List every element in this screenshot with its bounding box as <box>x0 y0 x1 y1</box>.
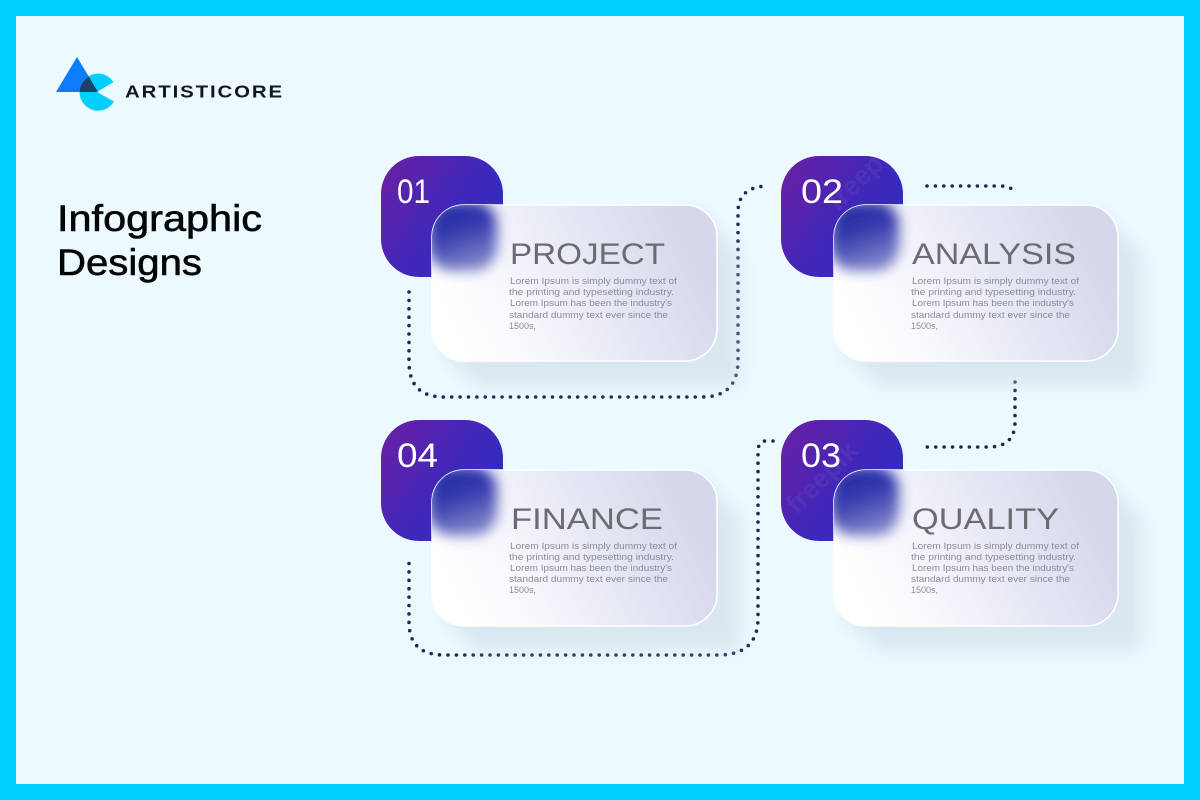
glass card <box>432 470 717 626</box>
body text: Lorem Ipsum is simply dummy text of <box>510 541 677 552</box>
frosted overlap <box>830 201 899 271</box>
title <box>57 198 262 283</box>
heading: ANALYSIS <box>912 238 1076 271</box>
card shadow <box>842 477 1141 651</box>
body text: Lorem Ipsum has been the industry's <box>510 563 672 574</box>
body text: standard dummy text ever since the <box>911 574 1070 585</box>
watermark: freepik <box>780 435 865 519</box>
card shadow <box>440 212 740 386</box>
logo <box>56 57 284 111</box>
body text: 1500s, <box>911 321 938 332</box>
body text: Lorem Ipsum is simply dummy text of <box>912 276 1079 287</box>
body text: 1500s, <box>911 585 938 596</box>
heading: FINANCE <box>511 503 663 536</box>
body text: the printing and typesetting industry. <box>911 552 1076 563</box>
dotted connector: project to analysis <box>409 186 767 397</box>
body text <box>509 541 677 596</box>
body text: Lorem Ipsum is simply dummy text of <box>510 276 677 287</box>
logo wordmark: ARTISTICORE <box>125 82 284 102</box>
panel: 01 project <box>381 156 740 386</box>
panel: 04 finance <box>381 420 740 651</box>
panel: 03 quality <box>780 420 1141 651</box>
frosted overlap <box>830 466 899 536</box>
body text <box>509 276 677 332</box>
card shadow <box>440 477 740 651</box>
body text: standard dummy text ever since the <box>911 310 1070 321</box>
title: Infographic <box>57 198 262 239</box>
number badge <box>381 420 503 541</box>
badge number: 02 <box>801 173 843 211</box>
dotted connector: analysis top <box>927 186 1016 194</box>
body text: standard dummy text ever since the <box>509 310 668 321</box>
panel: 02 analysis <box>781 132 1141 386</box>
watermark: freepik <box>821 132 906 216</box>
glass card <box>834 205 1118 361</box>
body text: the printing and typesetting industry. <box>509 287 674 298</box>
body text: 1500s, <box>509 321 536 332</box>
body text: standard dummy text ever since the <box>509 574 668 585</box>
heading: PROJECT <box>510 238 665 271</box>
dotted connector: analysis to quality <box>922 382 1015 447</box>
body text: 1500s, <box>509 585 536 596</box>
badge number: 03 <box>801 437 841 475</box>
badge number: 04 <box>397 437 438 475</box>
badge number: 01 <box>397 173 430 211</box>
body text: Lorem Ipsum has been the industry's <box>912 563 1074 574</box>
glass card <box>432 205 717 361</box>
body text: Lorem Ipsum has been the industry's <box>912 298 1074 309</box>
body text <box>911 541 1079 596</box>
icon: logo overlap <box>80 76 98 92</box>
body text: the printing and typesetting industry. <box>509 552 674 563</box>
title: Designs <box>57 242 202 283</box>
heading: QUALITY <box>912 503 1059 536</box>
glass card <box>834 470 1118 626</box>
icon: logo triangle <box>56 57 98 92</box>
number badge <box>381 156 503 277</box>
body text: Lorem Ipsum is simply dummy text of <box>912 541 1079 552</box>
frosted overlap <box>428 466 497 536</box>
body text: the printing and typesetting industry. <box>911 287 1076 298</box>
number badge <box>781 420 903 541</box>
icon: logo cyan circle <box>80 74 114 111</box>
body text <box>911 276 1079 332</box>
card shadow <box>842 212 1141 386</box>
number badge <box>781 156 903 277</box>
body text: Lorem Ipsum has been the industry's <box>510 298 672 309</box>
dotted connector: quality to finance <box>409 441 773 655</box>
frosted overlap <box>428 201 497 271</box>
